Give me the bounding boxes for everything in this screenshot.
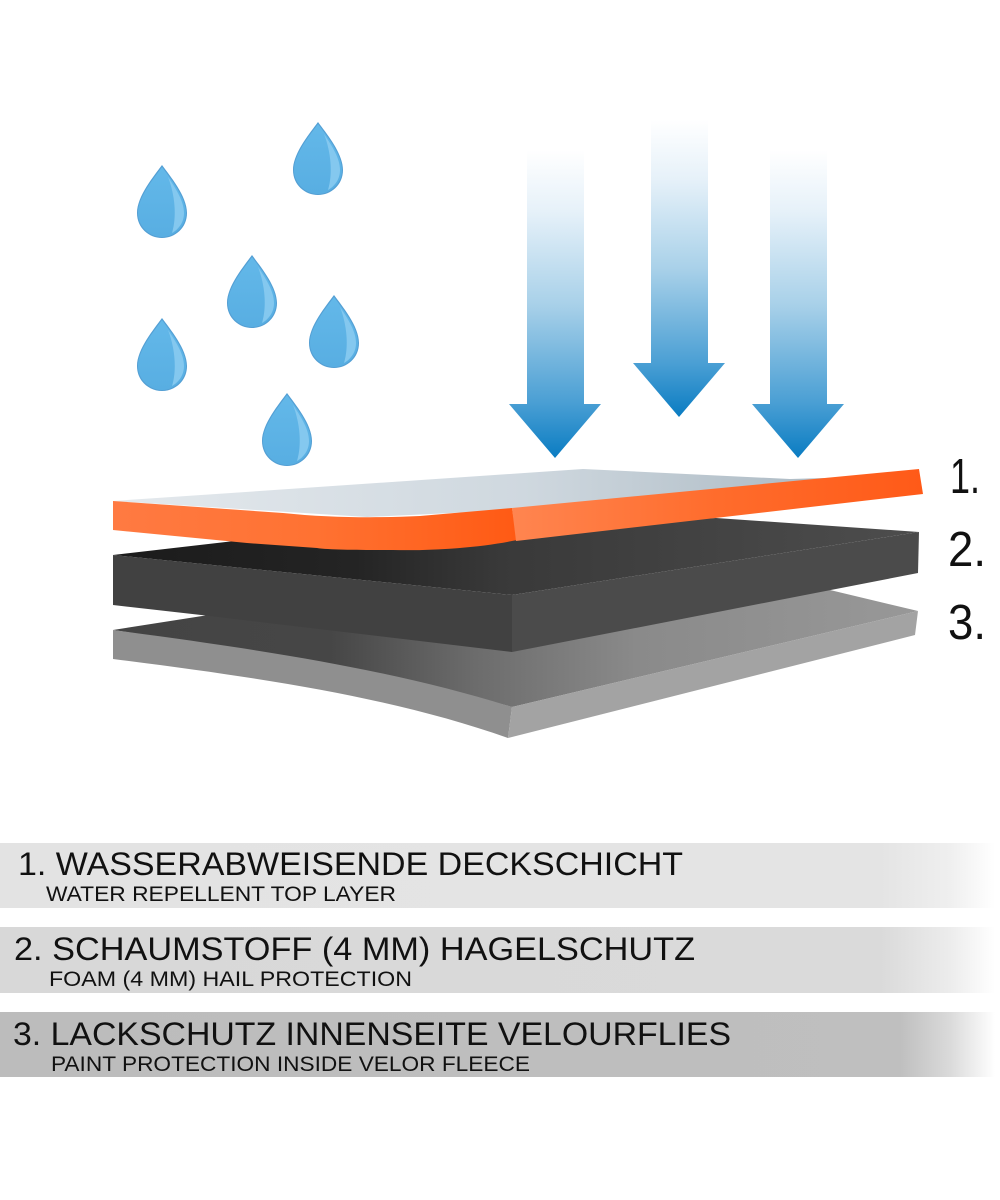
layer number 3: 3. <box>948 596 986 650</box>
icon: water drop 5 <box>137 318 187 391</box>
layer 2: foam <box>113 518 919 652</box>
band 2: foam caption: FOAM (4 MM) HAIL PROTECTION <box>49 968 412 991</box>
icon: water drop 6 <box>262 393 312 466</box>
layer stack diagram <box>113 469 923 738</box>
icon: water drop 1 <box>137 165 187 238</box>
arrow 3 <box>752 150 844 458</box>
arrow 2 <box>633 120 725 417</box>
arrow 1 <box>509 150 601 458</box>
icon: water drop 3 <box>227 255 277 328</box>
band 1: top layer caption: WATER REPELLENT TOP LAYER <box>46 883 396 906</box>
band 2: foam caption: 2. SCHAUMSTOFF (4 MM) HAGELSCHUTZ <box>14 931 695 967</box>
layer 1: water repellent top layer <box>113 469 923 550</box>
band 3: fleece caption: PAINT PROTECTION INSIDE VELOR FLEECE <box>51 1053 530 1076</box>
water drops <box>137 122 359 466</box>
band 3: fleece caption: 3. LACKSCHUTZ INNENSEITE VELOURFLIES <box>13 1016 731 1052</box>
band 1: top layer caption: 1. WASSERABWEISENDE DECKSCHICHT <box>18 846 683 882</box>
layer 3: velour fleece <box>113 590 918 738</box>
layer number 1: 1. <box>950 450 980 504</box>
icon: water drop 4 <box>309 295 359 368</box>
band 3: fleece caption <box>0 1012 1000 1077</box>
arrows pressing down <box>509 120 844 458</box>
band 1: top layer caption <box>0 843 1000 908</box>
icon: water drop 2 <box>293 122 343 195</box>
layer number 2: 2. <box>948 523 986 577</box>
band 2: foam caption <box>0 927 1000 993</box>
